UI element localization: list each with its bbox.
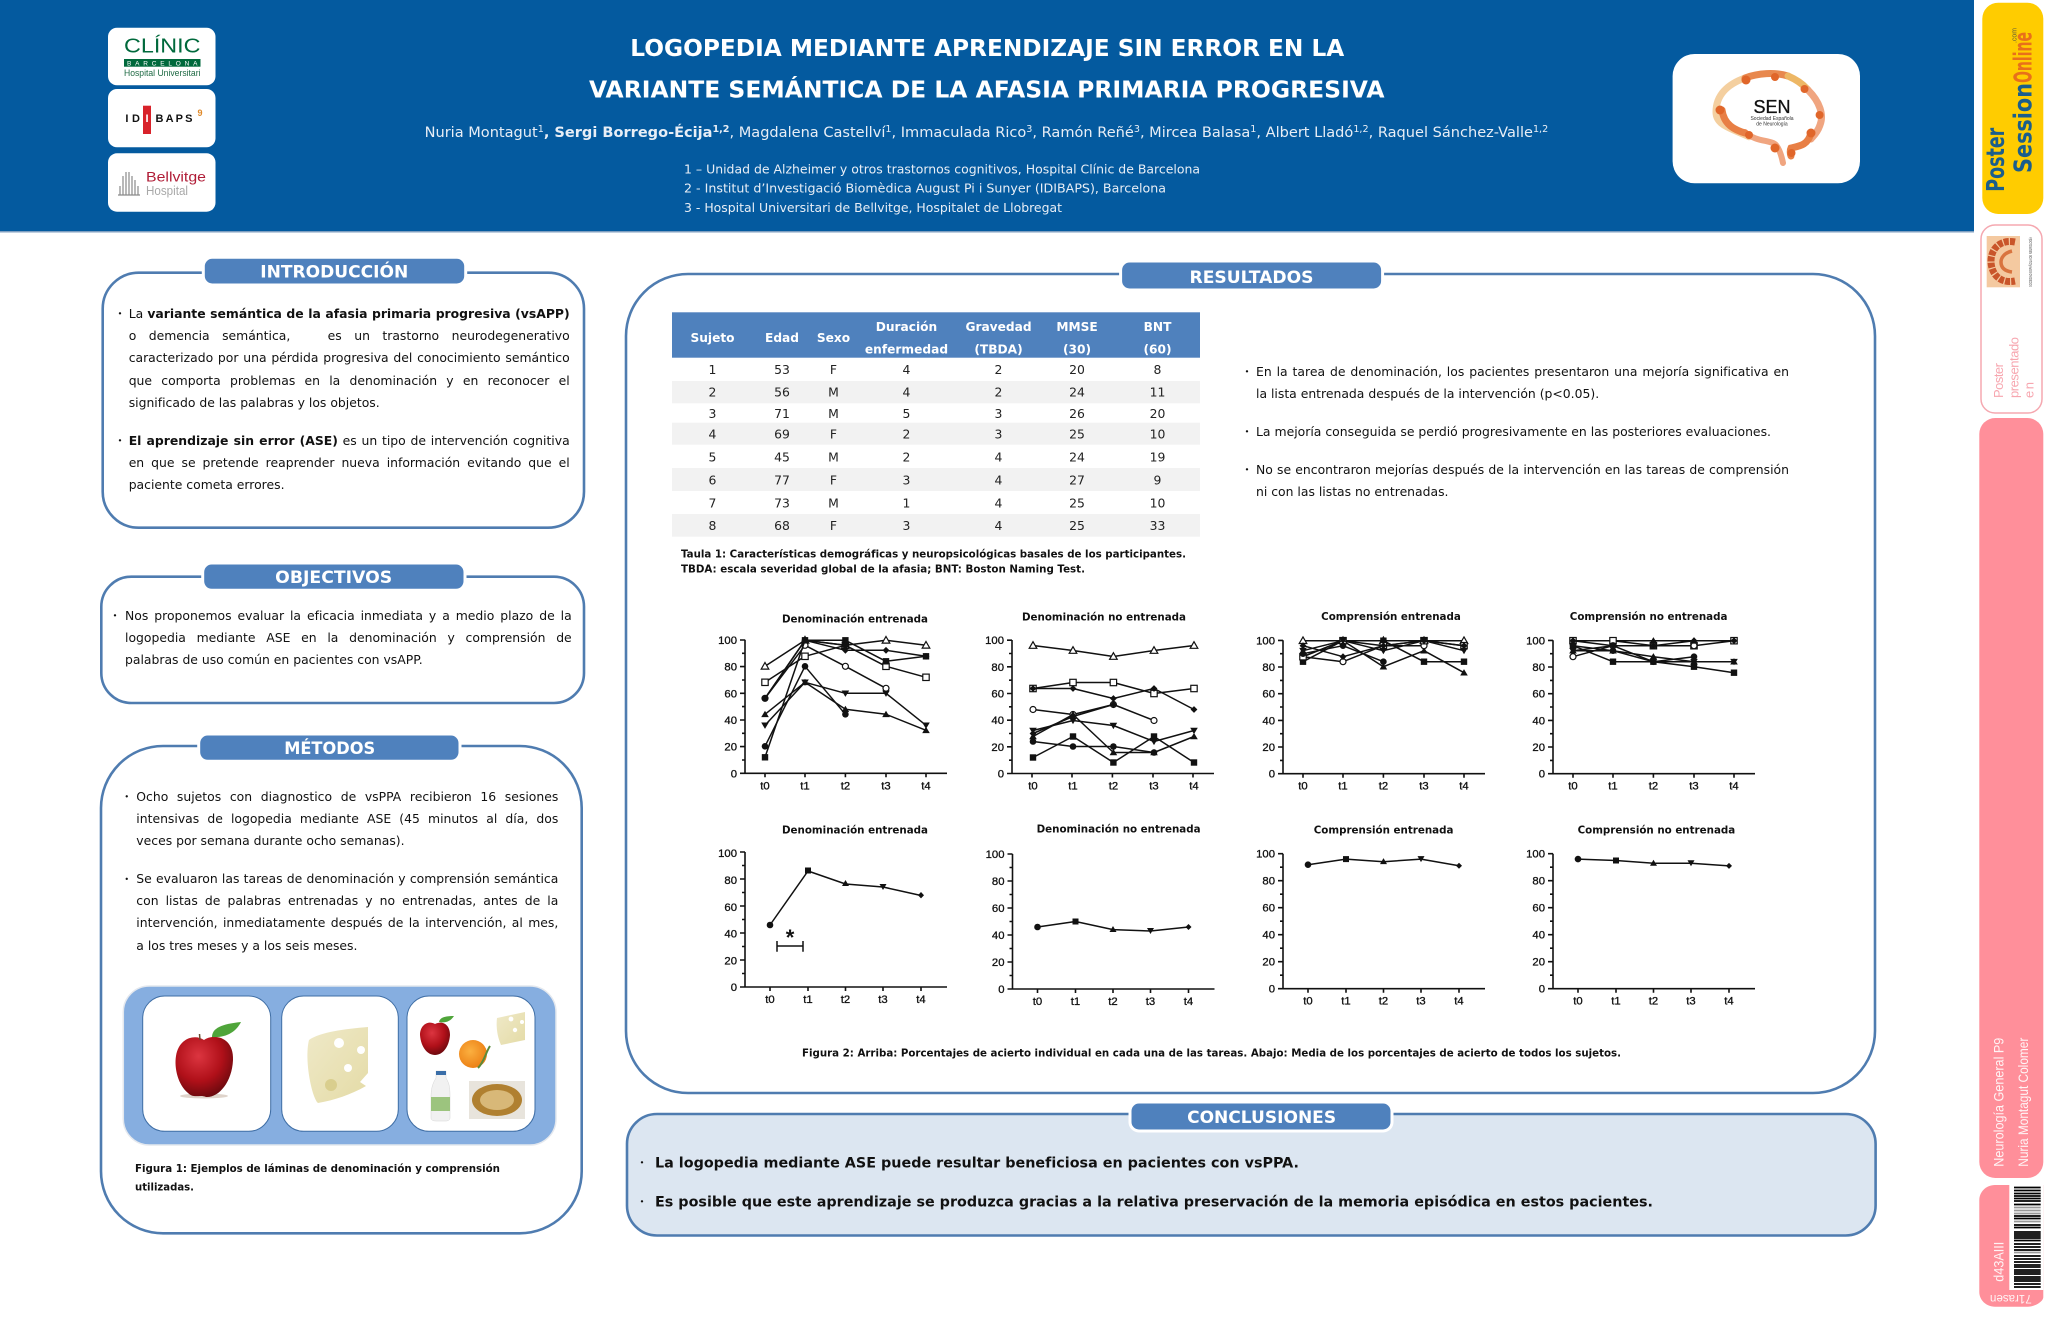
- chart: denominación no entrenada (individual): 40: [991, 715, 1004, 727]
- table rows: 8: [1154, 362, 1162, 377]
- icon: brain section: [1987, 236, 2020, 287]
- logo: SEN: de Neurología: [1756, 122, 1788, 128]
- authors: 1,2: [1353, 124, 1369, 135]
- chart: denominación entrenada (individual): t1: [800, 780, 810, 792]
- table rows: 71: [774, 406, 790, 421]
- chart: comprensión no entrenada (individual): [1526, 611, 1755, 793]
- table 1: participants: [672, 312, 1200, 537]
- chart: denominación entrenada (individual): t2: [841, 780, 850, 792]
- chart: denominación entrenada (media): Denominación entrenada: [782, 824, 928, 836]
- table rows: 2: [903, 427, 910, 442]
- authors: , Ramón Reñé: [1032, 124, 1134, 141]
- chart: comprensión entrenada (media): t2: [1379, 996, 1388, 1008]
- chart: denominación no entrenada (individual): 60: [991, 688, 1004, 700]
- table rows: 5: [709, 450, 716, 465]
- logo: IDIBAPS: 9: [198, 108, 203, 118]
- heading: métodos: [199, 734, 460, 761]
- chart: comprensión no entrenada (media): 80: [1532, 876, 1545, 888]
- table rows: 2: [995, 362, 1002, 377]
- authors: 1,2: [1533, 124, 1548, 135]
- text: objetivos: palabras de uso común en pacientes con vsAPP.: [125, 652, 423, 667]
- text: introducción: •: [118, 436, 122, 446]
- chart: denominación no entrenada (media): [986, 824, 1214, 1008]
- logo: IDIBAPS: BAPS: [156, 113, 192, 125]
- chart: comprensión entrenada (individual): t1: [1338, 781, 1348, 793]
- chart: denominación no entrenada (media): Denominación no entrenada: [1037, 824, 1201, 836]
- table rows: 2: [995, 385, 1002, 400]
- table rows: 3: [903, 472, 910, 487]
- text: objetivos: [113, 605, 572, 673]
- table rows: 3: [709, 406, 716, 421]
- chart: denominación entrenada (media): 20: [724, 955, 737, 967]
- chart: comprensión no entrenada (individual): 20: [1532, 742, 1545, 754]
- table rows: 2: [709, 385, 716, 400]
- text: métodos: veces por semana durante ocho semanas).: [136, 833, 405, 848]
- table rows: 3: [995, 427, 1002, 442]
- chart: comprensión entrenada (individual): 40: [1262, 715, 1275, 727]
- table rows: 7: [709, 495, 716, 510]
- logo: IDIBAPS: [108, 89, 216, 147]
- chart: denominación entrenada (media): 60: [724, 902, 737, 914]
- table rows: 20: [1069, 362, 1085, 377]
- chart: comprensión entrenada (media): [1256, 824, 1485, 1008]
- chart: denominación no entrenada (individual): t3: [1149, 780, 1159, 792]
- table rows: 73: [774, 495, 790, 510]
- chart: comprensión entrenada (individual): 60: [1262, 689, 1275, 701]
- sidebar: barcode and id: [1979, 1185, 2043, 1307]
- logo: Bellvitge Hospital: [108, 153, 216, 212]
- affiliations: 2 - Institut d’Investigació Biomèdica August Pi i Sunyer (IDIBAPS), Barcelona: [684, 181, 1166, 196]
- title: VARIANTE SEMÁNTICA DE LA AFASIA PRIMARIA PROGRESIVA: [589, 75, 1385, 103]
- authors: 1: [885, 124, 891, 135]
- chart: denominación no entrenada (media): t1: [1071, 996, 1080, 1008]
- table header: BNT: [1144, 320, 1172, 334]
- text: conclusiones: Es posible que este aprendizaje se produzca gracias a la relativa preservación de la memoria episódica en estos pacientes.: [655, 1195, 1653, 1211]
- text: objetivos: logopedia mediante ASE en la denominación y comprensión de: [125, 630, 572, 645]
- table rows: 3: [903, 518, 910, 533]
- table rows: 4: [995, 495, 1003, 510]
- table rows: 25: [1069, 518, 1085, 533]
- chart: comprensión no entrenada (media): 0: [1539, 984, 1545, 996]
- chart: comprensión entrenada (individual): t3: [1419, 781, 1429, 793]
- logo: Clínic Barcelona: Hospital Universitari: [124, 68, 200, 78]
- figure 1: picture cards: [123, 986, 556, 1145]
- chart: comprensión no entrenada (media): t3: [1686, 996, 1696, 1008]
- text: métodos: con listas de palabras entrenadas y no entrenadas, antes de la: [136, 893, 558, 908]
- authors: 1: [538, 124, 544, 135]
- text: introducción: en que se pretende reaprender nueva información evitando que el: [129, 455, 570, 470]
- table rows: 24: [1069, 385, 1085, 400]
- logo: SEN: SEN: [1753, 97, 1791, 117]
- affiliations: 1 – Unidad de Alzheimer y otros trastornos cognitivos, Hospital Clínic de Barcelona: [684, 161, 1200, 176]
- chart: denominación no entrenada (media): 100: [986, 849, 1004, 861]
- panel: resultados: [626, 261, 1875, 1093]
- chart: comprensión no entrenada (individual): 60: [1532, 689, 1545, 701]
- table rows: 1: [709, 362, 716, 377]
- table rows: 24: [1069, 450, 1085, 465]
- chart: denominación no entrenada (individual): [985, 612, 1214, 792]
- table rows: 4: [709, 427, 717, 442]
- chart: denominación entrenada (individual): 100: [718, 635, 737, 647]
- chart: denominación no entrenada (individual): 80: [991, 662, 1004, 674]
- chart: comprensión no entrenada (media): t1: [1611, 996, 1621, 1008]
- chart: denominación no entrenada (individual): 20: [991, 742, 1004, 754]
- heading: objetivos: OBJECTIVOS: [275, 568, 392, 588]
- sidebar: PosterSessionOnline logo: Session: [2008, 83, 2038, 173]
- chart: comprensión entrenada (media): Comprensión entrenada: [1314, 824, 1453, 836]
- sidebar: PosterSessionOnline logo: Poster: [1981, 127, 2010, 192]
- sidebar: poster presentado en: presentado: [2006, 337, 2022, 398]
- chart: comprensión entrenada (individual): t2: [1379, 781, 1388, 793]
- chart: comprensión entrenada (media): 100: [1256, 849, 1275, 861]
- sidebar: barcode and id: 71rasen: [1990, 1292, 2032, 1306]
- table header: Duración: [876, 320, 937, 334]
- authors: , Sergi Borrego-Écija: [544, 123, 712, 141]
- table rows: 25: [1069, 495, 1085, 510]
- table rows: 26: [1069, 406, 1085, 421]
- chart: comprensión entrenada (individual): 80: [1262, 662, 1275, 674]
- chart: denominación entrenada (media): t3: [878, 994, 888, 1006]
- chart: denominación no entrenada (media): 20: [992, 957, 1004, 969]
- caption: figura 2: Figura 2: Arriba: Porcentajes de acierto individual en cada una de las tareas. Abajo: Media de los porcentajes de acierto de todos los sujetos.: [802, 1048, 1621, 1060]
- heading: resultados: [1121, 261, 1383, 290]
- heading: métodos: MÉTODOS: [284, 737, 375, 759]
- table rows: 6: [709, 472, 717, 487]
- table header: (60): [1143, 342, 1172, 356]
- chart: comprensión entrenada (individual): 100: [1256, 635, 1275, 647]
- text: introducción: La variante semántica de la afasia primaria progresiva (vsAPP): [129, 306, 570, 321]
- table rows: 2: [903, 450, 910, 465]
- table header: Gravedad: [965, 320, 1032, 334]
- chart: denominación entrenada (individual): t4: [921, 780, 931, 792]
- chart: comprensión no entrenada (individual): t2: [1649, 781, 1658, 793]
- chart: comprensión entrenada (media): 40: [1262, 930, 1275, 942]
- table rows: M: [828, 406, 839, 421]
- chart: denominación entrenada (individual): 20: [724, 742, 737, 754]
- heading: resultados: RESULTADOS: [1190, 268, 1314, 288]
- logo: SEN: [1673, 54, 1860, 183]
- chart: comprensión entrenada (media): 20: [1262, 957, 1275, 969]
- logo: Clínic Barcelona: BARCELONA: [127, 60, 198, 67]
- chart: comprensión entrenada (individual): Comprensión entrenada: [1321, 611, 1461, 623]
- authors: 3: [1026, 124, 1032, 135]
- chart: denominación entrenada (media): 40: [724, 928, 737, 940]
- text: métodos: Se evaluaron las tareas de denominación y comprensión semántica: [136, 871, 558, 886]
- table rows: 45: [774, 450, 790, 465]
- chart: denominación entrenada (media): 80: [724, 875, 737, 887]
- sidebar: poster presentado en: SOCIEDAD ESPAÑOLA DE NEUROLOGÍA: [2027, 237, 2033, 287]
- text: métodos: •: [124, 875, 129, 884]
- table rows: 3: [995, 406, 1002, 421]
- chart: comprensión no entrenada (individual): t0: [1568, 781, 1578, 793]
- text: introducción: •: [118, 310, 122, 318]
- chart: denominación no entrenada (individual): 0: [998, 768, 1004, 780]
- panel: conclusiones: [627, 1102, 1876, 1236]
- chart: comprensión entrenada (individual): t4: [1459, 781, 1469, 793]
- caption: tabla 1: Taula 1: Características demográficas y neuropsicológicas basales de los participantes.: [681, 549, 1186, 561]
- affiliations: [684, 161, 1200, 215]
- chart: comprensión entrenada (media): 80: [1262, 876, 1275, 888]
- table rows: 19: [1150, 450, 1165, 465]
- table rows: 9: [1154, 472, 1162, 487]
- logo: Clínic Barcelona: [108, 28, 216, 85]
- chart: denominación no entrenada (individual): t1: [1068, 780, 1078, 792]
- text: conclusiones: •: [640, 1158, 644, 1168]
- table rows: 10: [1150, 427, 1165, 442]
- chart: comprensión entrenada (individual): 20: [1262, 742, 1275, 754]
- table rows: 1: [903, 495, 910, 510]
- affiliations: 3 - Hospital Universitari de Bellvitge, Hospitalet de Llobregat: [684, 200, 1062, 215]
- table rows: 10: [1150, 495, 1165, 510]
- authors: , Raquel Sánchez-Valle: [1369, 124, 1533, 141]
- title: LOGOPEDIA MEDIANTE APRENDIZAJE SIN ERROR EN LA: [630, 36, 1344, 62]
- text: resultados: La mejoría conseguida se perdió progresivamente en las posteriores evaluaciones.: [1256, 424, 1771, 439]
- authors: , Albert Lladó: [1256, 124, 1353, 141]
- caption: figura 1: [135, 1163, 500, 1194]
- heading: conclusiones: CONCLUSIONES: [1187, 1108, 1336, 1128]
- table rows: F: [830, 518, 837, 533]
- authors: , Magdalena Castellví: [729, 124, 886, 141]
- chart: denominación entrenada (individual): Denominación entrenada: [782, 614, 928, 626]
- text: resultados: la lista entrenada después de la intervención (p<0.05).: [1256, 386, 1599, 401]
- table rows: 4: [903, 362, 911, 377]
- chart: comprensión no entrenada (media): 20: [1532, 957, 1545, 969]
- table rows: 11: [1150, 385, 1165, 400]
- chart: comprensión entrenada (media): 0: [1269, 984, 1275, 996]
- table header: enfermedad: [865, 342, 948, 356]
- chart: comprensión no entrenada (media): Comprensión no entrenada: [1578, 824, 1735, 836]
- chart: comprensión no entrenada (individual): 0: [1539, 769, 1545, 781]
- card: apple: [143, 996, 271, 1131]
- sidebar: barcode and id: d43AIII: [1990, 1242, 2006, 1282]
- text: conclusiones: [640, 1156, 1653, 1211]
- sidebar: session and presenter: Neurología General P9: [1990, 1038, 2006, 1167]
- authors: 1: [1250, 124, 1256, 135]
- chart: denominación no entrenada (individual): Denominación no entrenada: [1022, 612, 1186, 624]
- authors: , Immaculada Rico: [891, 124, 1026, 141]
- chart: comprensión no entrenada (individual): t3: [1689, 781, 1699, 793]
- heading: objetivos: [203, 563, 465, 590]
- caption: tabla 1: [681, 549, 1186, 576]
- authors: 3: [1134, 124, 1140, 135]
- sidebar: session and presenter: [1979, 418, 2043, 1178]
- chart: denominación entrenada (media): t1: [803, 994, 813, 1006]
- chart: denominación entrenada (individual): t3: [881, 780, 891, 792]
- authors: Nuria Montagut: [425, 124, 538, 141]
- chart: denominación entrenada (individual): 80: [724, 662, 737, 674]
- text: introducción: paciente cometa errores.: [129, 477, 285, 492]
- text: introducción: [118, 303, 570, 498]
- table rows: 69: [774, 427, 790, 442]
- card: cheese: [282, 996, 398, 1131]
- sidebar: poster presentado en: Poster: [1991, 362, 2006, 398]
- logo: Bellvitge Hospital: Hospital: [146, 183, 188, 198]
- chart: comprensión no entrenada (media): 100: [1526, 849, 1545, 861]
- text: introducción: significado de las palabras y los objetos.: [129, 395, 380, 410]
- caption: tabla 1: TBDA: escala severidad global de la afasia; BNT: Boston Naming Test.: [681, 564, 1085, 576]
- table rows: 77: [774, 472, 790, 487]
- text: métodos: a los tres meses y a los seis meses.: [136, 938, 357, 953]
- logo: IDIBAPS: ID: [125, 113, 140, 125]
- table rows: 33: [1150, 518, 1165, 533]
- logo: IDIBAPS: I: [145, 113, 149, 125]
- table rows: 20: [1150, 406, 1165, 421]
- authors: 1,2: [712, 124, 729, 135]
- chart: denominación no entrenada (media): t0: [1033, 996, 1042, 1008]
- table rows: 56: [774, 385, 790, 400]
- sidebar: poster presentado en: [1981, 225, 2042, 413]
- table header: Edad: [765, 331, 799, 345]
- chart: comprensión no entrenada (media): t2: [1649, 996, 1658, 1008]
- panel: objetivos: [101, 563, 584, 703]
- text: métodos: Ocho sujetos con diagnostico de vsPPA recibieron 16 sesiones: [136, 789, 558, 804]
- table rows: 27: [1069, 472, 1085, 487]
- chart: denominación no entrenada (media): t4: [1184, 996, 1193, 1008]
- chart: comprensión no entrenada (media): t0: [1573, 996, 1583, 1008]
- chart: comprensión no entrenada (individual): t1: [1608, 781, 1618, 793]
- heading: introducción: INTRODUCCIÓN: [260, 261, 408, 283]
- table rows: 53: [774, 362, 790, 377]
- chart: comprensión no entrenada (individual): 80: [1532, 662, 1545, 674]
- text: métodos: intervención, inmediatamente después de la intervención, al mes,: [136, 915, 558, 930]
- table header: (TBDA): [974, 342, 1023, 356]
- chart: comprensión no entrenada (media): 40: [1532, 930, 1545, 942]
- chart: denominación no entrenada (media): 60: [992, 903, 1004, 915]
- chart: comprensión no entrenada (individual): Comprensión no entrenada: [1570, 611, 1727, 623]
- chart: comprensión no entrenada (media): 60: [1532, 903, 1545, 915]
- chart: comprensión no entrenada (individual): t4: [1729, 781, 1739, 793]
- table header: MMSE: [1056, 320, 1098, 334]
- text: resultados: •: [1245, 368, 1249, 376]
- chart: comprensión entrenada (media): t0: [1303, 996, 1313, 1008]
- text: conclusiones: La logopedia mediante ASE puede resultar beneficiosa en pacientes con vsPPA.: [655, 1156, 1299, 1172]
- logo: Clínic Barcelona: CLÍNIC: [124, 35, 200, 58]
- chart: denominación no entrenada (media): 40: [992, 930, 1004, 942]
- text: resultados: ni con las listas no entrenadas.: [1256, 484, 1448, 499]
- chart: denominación no entrenada (media): t3: [1146, 996, 1155, 1008]
- significance marker: [777, 925, 803, 952]
- chart: denominación no entrenada (individual): t4: [1189, 780, 1199, 792]
- chart: comprensión no entrenada (media): [1526, 824, 1755, 1008]
- chart: denominación entrenada (individual): t0: [760, 780, 770, 792]
- chart: comprensión entrenada (individual): t0: [1298, 781, 1308, 793]
- table rows: 4: [995, 472, 1003, 487]
- header banner: [0, 0, 1974, 232]
- table rows: 68: [774, 518, 790, 533]
- chart: denominación entrenada (individual): 0: [731, 768, 737, 780]
- significance marker: *: [786, 925, 795, 950]
- chart: denominación no entrenada (individual): t2: [1109, 780, 1118, 792]
- table rows: 5: [903, 406, 910, 421]
- text: objetivos: Nos proponemos evaluar la eficacia inmediata y a medio plazo de la: [125, 608, 572, 623]
- text: métodos: intensivas de logopedia mediante ASE (45 minutos al día, dos: [136, 811, 558, 826]
- chart: comprensión entrenada (individual): [1256, 611, 1485, 793]
- title: [589, 36, 1385, 103]
- caption: figura 1: utilizadas.: [135, 1182, 194, 1194]
- sidebar: session and presenter: Nuria Montagut Colomer: [2015, 1037, 2031, 1167]
- panel: introducción: [103, 257, 584, 528]
- text: resultados: No se encontraron mejorías después de la intervención en las tareas de comprensión: [1256, 462, 1789, 477]
- chart: denominación no entrenada (individual): 100: [985, 635, 1004, 647]
- text: introducción: El aprendizaje sin error (ASE) es un tipo de intervención cognitiva: [129, 433, 570, 448]
- heading: conclusiones: [1130, 1102, 1392, 1131]
- chart: denominación entrenada (media): t0: [765, 994, 775, 1006]
- card: multiple objects: [407, 996, 535, 1131]
- chart: denominación no entrenada (media): t2: [1108, 996, 1118, 1008]
- chart: denominación entrenada (media): t4: [916, 994, 926, 1006]
- table rows: F: [830, 362, 837, 377]
- table rows: 8: [709, 518, 717, 533]
- text: conclusiones: •: [640, 1198, 644, 1206]
- chart: comprensión entrenada (media): t3: [1416, 996, 1426, 1008]
- table rows: [709, 362, 1165, 533]
- logo: Bellvitge Hospital: Bellvitge: [146, 169, 206, 185]
- sidebar: poster presentado en: en: [2022, 382, 2036, 398]
- chart: comprensión entrenada (media): 60: [1262, 903, 1275, 915]
- table rows: F: [830, 472, 837, 487]
- chart: comprensión no entrenada (individual): 40: [1532, 715, 1545, 727]
- text: resultados: En la tarea de denominación, los pacientes presentaron una mejoría significativa en: [1256, 364, 1789, 379]
- table rows: M: [828, 385, 839, 400]
- panel: métodos: [101, 734, 582, 1233]
- table rows: F: [830, 427, 837, 442]
- table rows: 25: [1069, 427, 1085, 442]
- chart: denominación no entrenada (media): 80: [992, 876, 1004, 888]
- chart: comprensión entrenada (individual): 0: [1269, 769, 1275, 781]
- text: resultados: [1245, 361, 1789, 505]
- authors: , Mircea Balasa: [1140, 124, 1250, 141]
- chart: comprensión entrenada (media): t1: [1341, 996, 1351, 1008]
- text: introducción: o demencia semántica, es un trastorno neurodegenerativo: [129, 328, 570, 343]
- chart: denominación entrenada (media): 100: [718, 848, 737, 860]
- text: introducción: que comporta problemas en la denominación y en reconocer el: [129, 373, 570, 388]
- table rows: M: [828, 450, 839, 465]
- table rows: 4: [903, 385, 911, 400]
- logo: SEN: Sociedad Española: [1750, 116, 1794, 122]
- chart: comprensión entrenada (media): t4: [1454, 996, 1464, 1008]
- table header: Sujeto: [690, 331, 735, 345]
- text: métodos: [124, 786, 558, 958]
- chart: denominación entrenada (media): [718, 824, 947, 1006]
- table rows: 4: [995, 450, 1003, 465]
- chart: denominación entrenada (individual): 60: [724, 688, 737, 700]
- caption: figura 1: Figura 1: Ejemplos de láminas de denominación y comprensión: [135, 1163, 500, 1175]
- chart: denominación entrenada (individual): [718, 614, 947, 792]
- table rows: 4: [995, 518, 1003, 533]
- sidebar: PosterSessionOnline logo: [1981, 3, 2043, 214]
- text: métodos: •: [124, 792, 129, 802]
- chart: denominación no entrenada (media): 0: [998, 984, 1004, 996]
- chart: denominación entrenada (media): 0: [731, 982, 737, 994]
- text: resultados: •: [1245, 466, 1249, 474]
- sidebar: PosterSessionOnline logo: .com: [2012, 28, 2018, 43]
- chart: denominación no entrenada (individual): t0: [1028, 780, 1038, 792]
- table header: Sexo: [817, 331, 850, 345]
- table header: (30): [1063, 342, 1091, 356]
- text: resultados: •: [1245, 428, 1249, 436]
- chart: comprensión no entrenada (individual): 100: [1526, 635, 1545, 647]
- table header: [690, 320, 1172, 356]
- chart: denominación entrenada (individual): 40: [724, 715, 737, 727]
- text: objetivos: •: [113, 612, 117, 620]
- table rows: M: [828, 495, 839, 510]
- text: introducción: caracterizado por una pérdida progresiva del conocimiento semántico: [129, 350, 570, 365]
- heading: introducción: [203, 257, 466, 285]
- chart: comprensión no entrenada (media): t4: [1724, 996, 1734, 1008]
- chart: denominación entrenada (media): t2: [841, 994, 850, 1006]
